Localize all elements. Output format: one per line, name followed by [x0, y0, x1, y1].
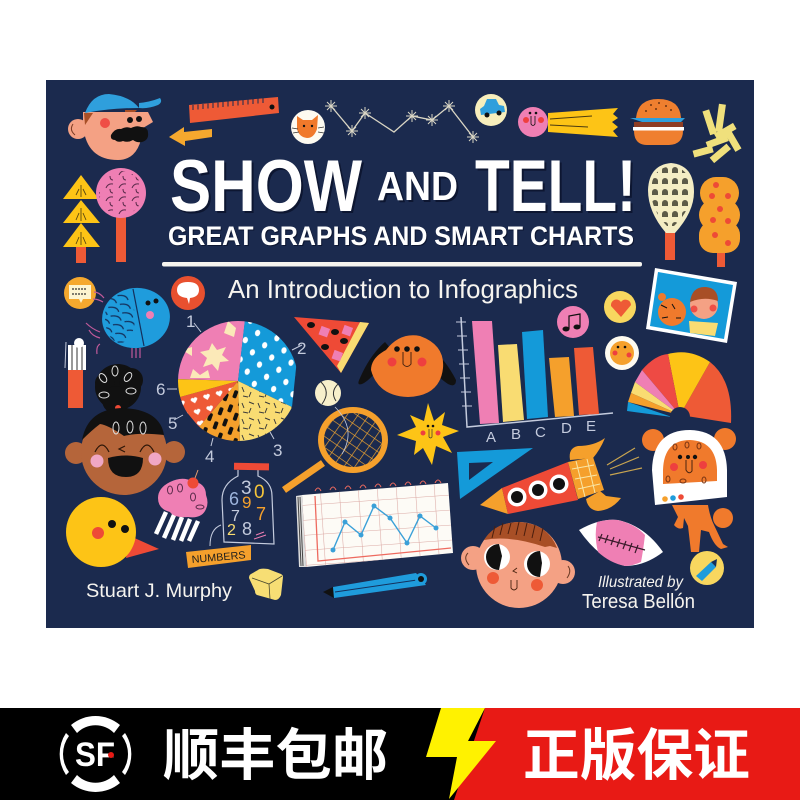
label: numbers: NUMBERS [191, 549, 246, 566]
icon: salt shaker [65, 338, 86, 408]
icon: number jar: 7 [256, 504, 266, 524]
icon: heart badge [604, 291, 636, 323]
icon: music note badge [557, 306, 589, 338]
bar labels: A [486, 429, 496, 446]
title: AND [377, 163, 458, 209]
red banner section [454, 708, 800, 800]
bar B [498, 344, 524, 422]
icon: number jar: 9 [242, 493, 251, 512]
icon: number jar: 3 [241, 478, 252, 499]
icon: cupcake [156, 470, 208, 541]
icon: tennis ball [315, 380, 341, 406]
chart: notebook line chart [296, 480, 453, 567]
icon: fries [693, 104, 741, 163]
icon: man with cap and moustache [68, 94, 161, 160]
icon: dog [358, 335, 456, 397]
bar labels: C [535, 424, 546, 441]
icon: tennis racket [284, 407, 388, 490]
icon: lion astronaut [642, 428, 736, 552]
bar C [522, 330, 548, 419]
icon: pen [323, 573, 427, 598]
title: SHOW [170, 146, 362, 227]
icon: burger [630, 99, 685, 145]
illustrator credit [582, 574, 695, 613]
icon: number jar: 0 [254, 482, 265, 503]
icon: pink tree [96, 168, 146, 262]
pie labels: 6 [156, 380, 165, 399]
icon: boy [461, 522, 575, 608]
icon: SF logo: SF [75, 736, 115, 774]
icon: pizza slice [294, 317, 369, 373]
icon: ruler [189, 97, 279, 123]
pie slice 6 yellow [175, 379, 238, 397]
icon: girl laughing [65, 364, 185, 495]
title [170, 146, 636, 227]
banner text left: 顺丰包邮 [163, 711, 388, 792]
icon: arrow [169, 127, 212, 146]
icon: small dog badge [605, 336, 639, 370]
icon: car badge [475, 94, 507, 126]
chart: fan chart [627, 352, 731, 427]
pie slice 2 blue [238, 319, 300, 407]
title: TELL! [475, 146, 636, 227]
icon: chick [66, 497, 159, 567]
icon: number jar [210, 463, 274, 546]
icon: football [579, 520, 663, 566]
chart: bar chart [456, 317, 613, 446]
pie slice 3 cream [238, 381, 292, 441]
bar E [574, 347, 599, 415]
bar labels: E [586, 418, 596, 435]
pie labels: 1 [186, 312, 195, 331]
icon: set square [457, 448, 533, 499]
pie slice 4 orange [199, 381, 240, 441]
bar labels: D [561, 420, 572, 437]
illustrator credit: Teresa Bellón [582, 591, 695, 613]
pie slice 1 pink [178, 320, 245, 381]
pie labels: 3 [273, 441, 282, 460]
bar labels [486, 418, 596, 446]
illustrator credit: Illustrated by [598, 574, 684, 591]
subtitle: GREAT GRAPHS AND SMART CHARTS [168, 221, 634, 251]
icon: number jar: 8 [242, 519, 252, 539]
icon: orange tree [699, 177, 740, 267]
bar labels: B [511, 426, 521, 443]
author name: Stuart J. Murphy [86, 580, 232, 602]
bar D [549, 357, 574, 417]
icon: speech badge yellow [64, 277, 96, 309]
icon: lightning bolt [426, 708, 496, 799]
divider rule [162, 262, 642, 266]
icon: rocket [480, 438, 642, 514]
icon: star sun [397, 403, 459, 465]
icon: SF logo [60, 716, 131, 792]
icon: photo [646, 268, 737, 343]
tagline: An Introduction to Infographics [228, 274, 578, 304]
icon: cream tree on stick [648, 163, 694, 260]
icon: crayon badge [690, 551, 724, 585]
icon: cat badge [291, 110, 325, 144]
icon: number jar: 7 [231, 508, 240, 525]
icon: number jar: 6 [229, 489, 239, 509]
icon: number jar: 2 [227, 522, 236, 539]
pie labels: 2 [297, 339, 306, 358]
icon: comet [518, 107, 618, 137]
bar A [472, 321, 499, 424]
icon: pine tree [63, 175, 100, 263]
banner text right: 正版保证 [523, 711, 750, 792]
pie labels [156, 312, 306, 466]
icon: speech badge red [171, 276, 205, 310]
icon: blue bug [86, 284, 174, 358]
panel: book cover [46, 80, 754, 628]
icon: cube [249, 569, 283, 600]
pie chart [156, 312, 306, 466]
label: numbers [186, 545, 251, 568]
chart line [330, 504, 438, 552]
pie slice 5 coral [175, 381, 238, 427]
icon: constellation [325, 100, 479, 143]
pie labels: 5 [168, 414, 177, 433]
pie labels: 4 [205, 447, 214, 466]
panel: bottom banner [0, 708, 800, 800]
